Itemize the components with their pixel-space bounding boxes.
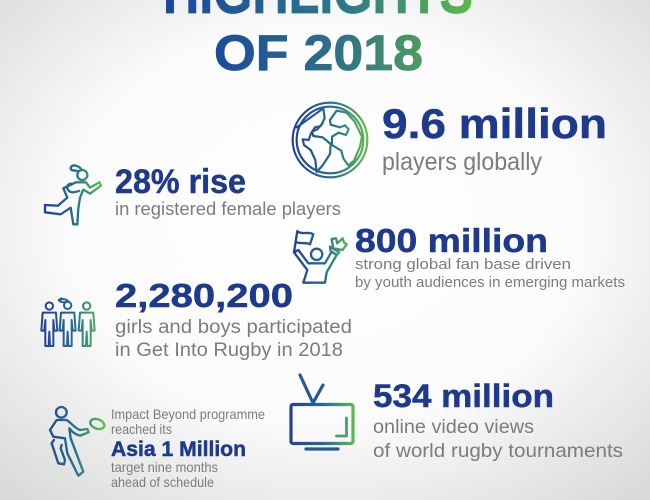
icon: globe xyxy=(293,103,367,177)
stat: 28% rise: in registered female players xyxy=(115,199,341,219)
stat: 2,280,200: 2,280,200 xyxy=(115,277,293,314)
stat: 9.6 million: 9.6 million xyxy=(382,100,607,147)
stat: 2,280,200: girls and boys participated xyxy=(115,317,352,338)
title: OF 2018 xyxy=(214,25,423,81)
stat: Asia 1 Million: Impact Beyond programme xyxy=(111,406,265,422)
stat: Asia 1 Million: target nine months xyxy=(111,459,218,475)
stat: Asia 1 Million: ahead of schedule xyxy=(111,474,214,490)
stat: 800 million: 800 million xyxy=(355,222,548,259)
stat: 800 million: by youth audiences in emerging markets xyxy=(355,275,625,291)
stat: Asia 1 Million: reached its xyxy=(111,421,172,437)
icon: rugby player xyxy=(50,407,106,476)
stat: 9.6 million: players globally xyxy=(382,148,542,176)
title xyxy=(163,0,473,81)
stat: 2,280,200: in Get Into Rugby in 2018 xyxy=(115,340,343,361)
stat: 800 million: strong global fan base driven xyxy=(355,257,571,273)
stat: 534 million: 534 million xyxy=(373,378,554,414)
icon: three children xyxy=(41,298,95,346)
stat: 534 million: of world rugby tournaments xyxy=(373,441,623,462)
stat: 2,280,200 xyxy=(115,277,352,361)
stat: 534 million xyxy=(373,378,623,462)
stat: 28% rise xyxy=(115,163,341,219)
stat: Asia 1 Million: Asia 1 Million xyxy=(111,438,246,461)
stat: 534 million: online video views xyxy=(373,417,534,438)
icon: television xyxy=(291,375,353,449)
stat: 9.6 million xyxy=(382,100,607,176)
stat: 800 million xyxy=(355,222,625,291)
stat: 28% rise: 28% rise xyxy=(115,163,246,201)
stat: Asia 1 Million xyxy=(111,406,265,490)
icon: female runner xyxy=(45,165,101,224)
icon: fan with flag and thumb xyxy=(294,231,347,283)
